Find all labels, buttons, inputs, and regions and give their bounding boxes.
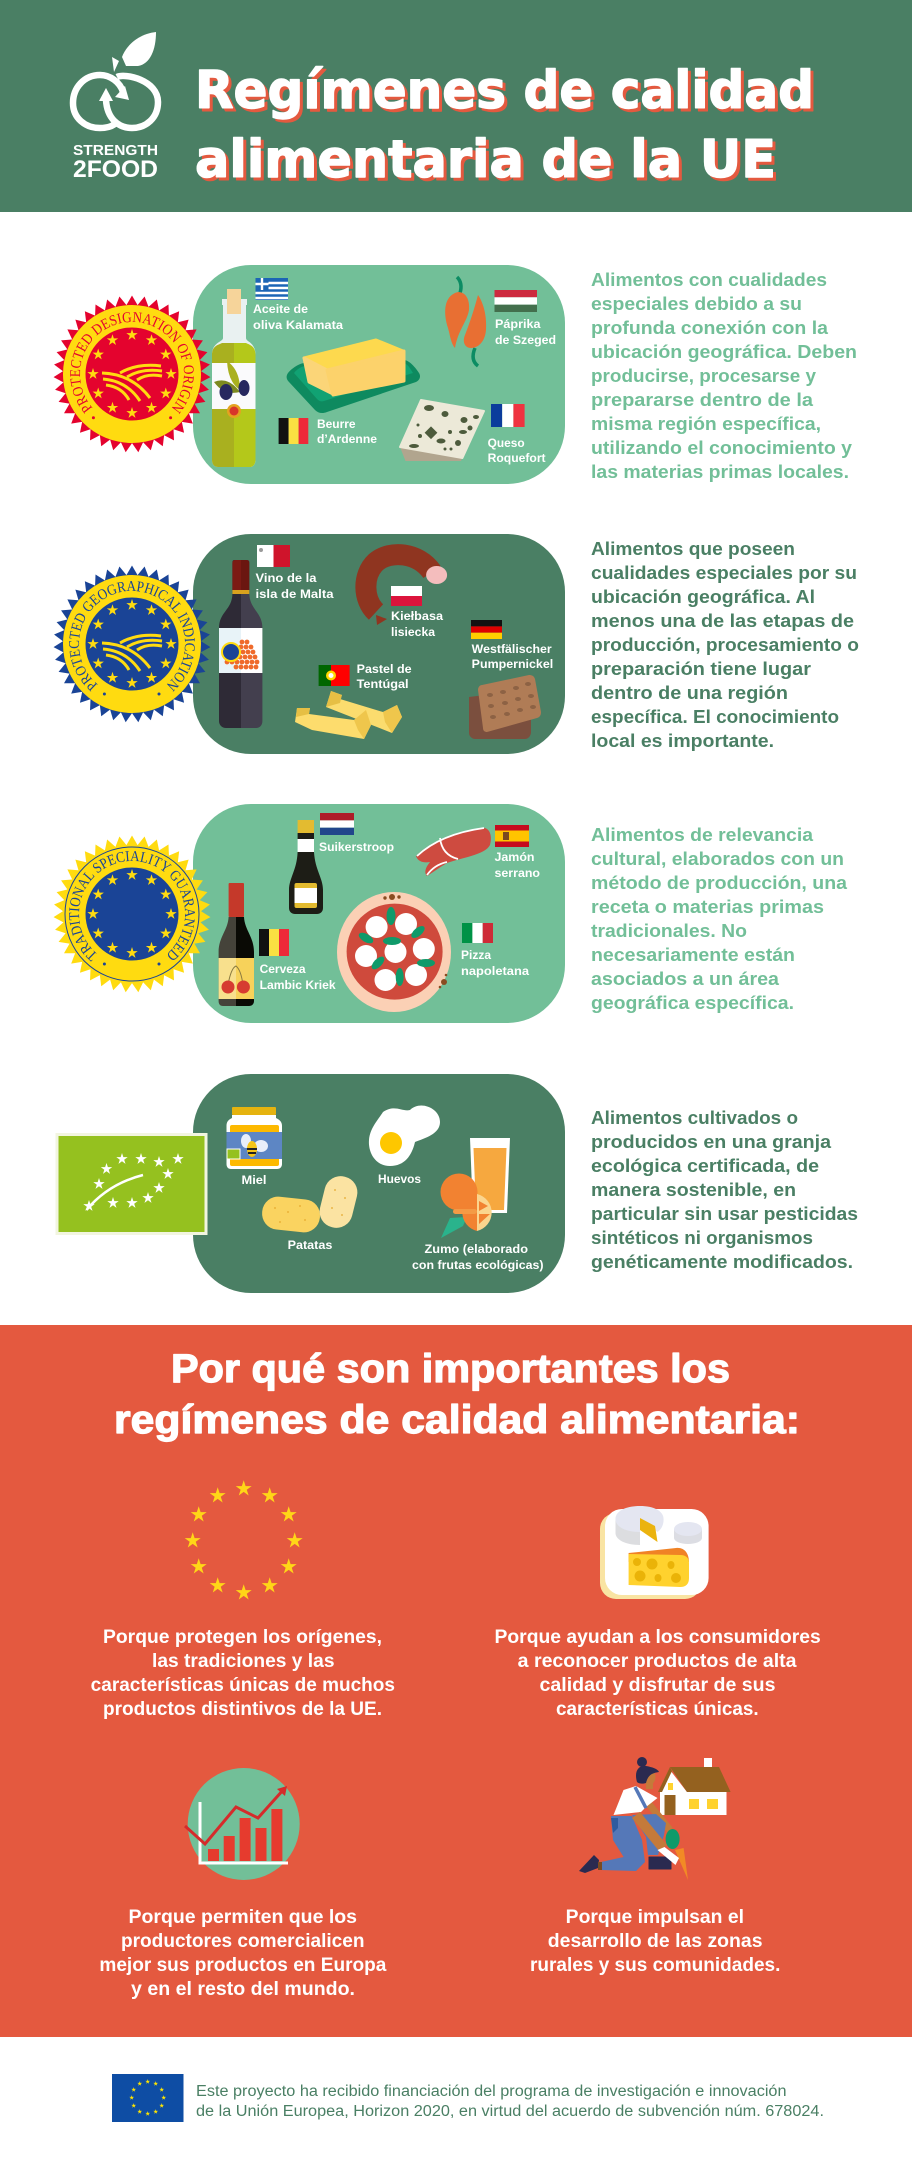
EU flag xyxy=(112,2074,184,2122)
label: Pizza napoletana: napoletana xyxy=(461,964,529,978)
text block: PGI description: específica. El conocimiento xyxy=(591,706,839,727)
label: Beurre d'Ardenne: d’Ardenne xyxy=(317,432,377,446)
ham xyxy=(416,828,491,876)
syrup bottle xyxy=(289,820,323,914)
text block: PDO description: profunda conexión con la xyxy=(591,317,829,338)
seal: TSG: TRADITIONAL SPECIALITY GUARANTEED xyxy=(69,851,195,962)
title xyxy=(195,61,814,190)
text block: PDO description: prepararse dentro de la xyxy=(591,389,814,410)
label: Westfälischer Pumpernickel: Westfälischer xyxy=(472,642,552,656)
text block: PDO description: las materias primas locales. xyxy=(591,461,849,482)
label: Huevos: Huevos xyxy=(378,1172,421,1186)
flag: Germany xyxy=(471,620,502,639)
flag: Poland xyxy=(391,586,422,606)
pumpernickel bread xyxy=(469,675,541,739)
heading: Por qué son importantes los xyxy=(171,1347,730,1391)
text block: TSG description: tradicionales. No xyxy=(591,920,747,941)
text block: organic description: manera sostenible, en xyxy=(591,1179,796,1200)
text block: organic description: particular sin usar pesticidas xyxy=(591,1203,858,1224)
label: Jamón serrano: serrano xyxy=(494,866,540,880)
panel: traditional speciality guaranteed xyxy=(54,804,565,1023)
text block: TSG description: Alimentos de relevancia xyxy=(591,824,814,845)
text: origins: productos distintivos de la UE. xyxy=(103,1699,382,1720)
heading: regímenes de calidad alimentaria: xyxy=(114,1398,800,1442)
text: rural development: Porque impulsan el xyxy=(566,1907,744,1928)
heading xyxy=(114,1347,800,1442)
label: Beurre d'Ardenne: Beurre xyxy=(317,417,356,431)
icon: EU stars xyxy=(185,1480,303,1599)
text: consumers xyxy=(494,1627,821,1720)
text: origins: Porque protegen los orígenes, xyxy=(103,1627,382,1648)
text block: organic description xyxy=(591,1107,858,1272)
flag: Spain xyxy=(495,825,529,847)
label: Queso Roquefort: Queso xyxy=(488,436,525,450)
logo: Strength2Food xyxy=(73,32,158,183)
flag: Netherlands xyxy=(320,813,354,835)
honey jar xyxy=(226,1107,282,1169)
text: origins: características únicas de muchos xyxy=(91,1675,395,1696)
header banner xyxy=(0,0,912,212)
text: rural development: desarrollo de las zonas xyxy=(548,1931,762,1952)
label: Patatas: Patatas xyxy=(288,1238,333,1252)
text block: PDO description: producirse, procesarse y xyxy=(591,365,817,386)
icon: growth chart xyxy=(185,1768,300,1880)
label: Cerveza Lambic Kriek: Cerveza xyxy=(260,962,306,976)
text block: PDO description: ubicación geográfica. Deben xyxy=(591,341,857,362)
label: Aceite de oliva Kalamata: oliva Kalamata xyxy=(253,318,343,332)
label: Queso Roquefort: Roquefort xyxy=(488,451,546,465)
text: consumers: calidad y disfrutar de sus xyxy=(540,1675,776,1696)
logo: EU organic leaf xyxy=(57,1134,206,1234)
funding text xyxy=(196,2083,824,2120)
text block: organic description: genéticamente modificados. xyxy=(591,1251,853,1272)
text: origins xyxy=(91,1627,395,1720)
text block: TSG description: cultural, elaborados con un xyxy=(591,848,844,869)
text block: PGI description: Alimentos que poseen xyxy=(591,538,795,559)
text block: PGI description xyxy=(591,538,859,751)
sausage xyxy=(366,555,447,625)
text: origins: las tradiciones y las xyxy=(152,1651,334,1672)
flag: Greece xyxy=(256,278,288,300)
text block: organic description: ecológica certificada, de xyxy=(591,1155,819,1176)
flag: Italy xyxy=(462,923,493,943)
label: Westfälischer Pumpernickel: Pumpernickel xyxy=(472,657,553,671)
label: Páprika de Szeged: de Szeged xyxy=(495,333,556,347)
seal: PGI xyxy=(54,566,210,722)
text block: organic description: producidos en una granja xyxy=(591,1131,832,1152)
text block: PDO description: especiales debido a su xyxy=(591,293,802,314)
text: producers xyxy=(99,1907,387,2000)
text: rural development: rurales y sus comunidades. xyxy=(530,1955,780,1976)
seal: PDO xyxy=(54,296,210,452)
text: producers: y en el resto del mundo. xyxy=(131,1979,355,2000)
text block: TSG description: necesariamente están xyxy=(591,944,795,965)
text block: PDO description: utilizando el conocimiento y xyxy=(591,437,853,458)
seal: TSG xyxy=(54,836,210,992)
flag: Hungary xyxy=(494,290,537,312)
label: Kiełbasa lisiecka: lisiecka xyxy=(391,625,435,639)
label: Pastel de Tentúgal: Tentúgal xyxy=(357,677,409,691)
panel: why quality schemes matter xyxy=(0,1325,912,2037)
text block: TSG description: receta o materias primas xyxy=(591,896,824,917)
text: producers: productores comercialicen xyxy=(121,1931,364,1952)
label: Vino de la isla de Malta: Vino de la xyxy=(256,571,317,585)
flag: Portugal xyxy=(319,665,350,686)
title: alimentaria de la UE xyxy=(195,130,776,190)
text block: TSG description: asociados a un área xyxy=(591,968,780,989)
funding text: Este proyecto ha recibido financiación del programa de investigación e innovación xyxy=(196,2083,786,2100)
text block: PDO description: Alimentos con cualidades xyxy=(591,269,827,290)
text: rural development xyxy=(530,1907,780,1976)
panel: organic farming xyxy=(57,1074,565,1293)
seal: PGI: PROTECTED GEOGRAPHICAL INDICATION xyxy=(69,581,195,692)
butter dish xyxy=(287,340,420,413)
flag: Belgium xyxy=(279,418,308,444)
logo: Strength2Food: 2FOOD xyxy=(73,156,158,183)
flag: France xyxy=(491,404,525,427)
label: Vino de la isla de Malta: isla de Malta xyxy=(256,587,334,601)
text block: organic description: Alimentos cultivados o xyxy=(591,1107,798,1128)
text block: TSG description: geográfica específica. xyxy=(591,992,794,1013)
label: Pastel de Tentúgal: Pastel de xyxy=(357,662,412,676)
title: Regímenes de calidad xyxy=(195,61,814,121)
label: Zumo elaborado con frutas ecológicas: Zumo (elaborado xyxy=(424,1242,528,1256)
label: Kiełbasa lisiecka: Kiełbasa xyxy=(391,609,443,623)
text block: PGI description: preparación tiene lugar xyxy=(591,658,811,679)
text block: PGI description: ubicación geográfica. Al xyxy=(591,586,815,607)
text block: PGI description: producción, procesamiento o xyxy=(591,634,859,655)
text block: organic description: sintéticos ni organismos xyxy=(591,1227,813,1248)
olive oil bottle xyxy=(212,289,256,467)
pastries xyxy=(295,691,402,739)
peppers xyxy=(445,277,486,366)
potatoes xyxy=(260,1173,361,1234)
wine bottle xyxy=(219,560,262,728)
funding text: de la Unión Europea, Horizon 2020, en virtud del acuerdo de subvención núm. 678024. xyxy=(196,2103,824,2120)
label: Aceite de oliva Kalamata: Aceite de xyxy=(253,302,308,316)
flag: Belgium xyxy=(259,929,289,956)
text block: PDO description: misma región específica, xyxy=(591,413,821,434)
text block: PGI description: dentro de una región xyxy=(591,682,788,703)
icon: cheese board xyxy=(600,1506,709,1599)
text block: TSG description xyxy=(591,824,848,1013)
panel: protected designation of origin xyxy=(54,265,565,484)
panel: protected geographical indication xyxy=(54,534,565,754)
text block: PGI description: local es importante. xyxy=(591,730,774,751)
label: Jamón serrano: Jamón xyxy=(494,850,534,864)
label: Pizza napoletana: Pizza xyxy=(461,948,491,962)
juice and oranges xyxy=(440,1138,510,1238)
pizza xyxy=(337,892,451,1012)
cherry beer bottle xyxy=(219,883,254,1006)
fried egg xyxy=(369,1106,440,1166)
label: Suikerstroop: Suikerstroop xyxy=(319,840,394,854)
text block: PGI description: cualidades especiales por su xyxy=(591,562,857,583)
icon: farmer with carrot and house xyxy=(579,1757,731,1880)
logo: Strength2Food: STRENGTH xyxy=(73,142,158,159)
label: Cerveza Lambic Kriek: Lambic Kriek xyxy=(260,978,336,992)
seal: PDO: PROTECTED DESIGNATION OF ORIGIN xyxy=(70,312,194,414)
text block: PGI description: menos una de las etapas de xyxy=(591,610,854,631)
text: consumers: Porque ayudan a los consumidores xyxy=(494,1627,821,1648)
flag: Malta xyxy=(257,545,290,567)
text: consumers: características únicas. xyxy=(556,1699,759,1720)
text: consumers: a reconocer productos de alta xyxy=(518,1651,797,1672)
text: producers: Porque permiten que los xyxy=(128,1907,357,1928)
label: Páprika de Szeged: Páprika xyxy=(495,317,541,331)
text: producers: mejor sus productos en Europa xyxy=(99,1955,387,1976)
text block: TSG description: método de producción, una xyxy=(591,872,848,893)
roquefort cheese xyxy=(400,400,484,461)
text block: PDO description xyxy=(591,269,857,482)
label: Zumo elaborado con frutas ecológicas: con frutas ecológicas) xyxy=(412,1258,544,1272)
label: Miel: Miel xyxy=(242,1173,266,1187)
footer: EU funding xyxy=(112,2074,824,2122)
